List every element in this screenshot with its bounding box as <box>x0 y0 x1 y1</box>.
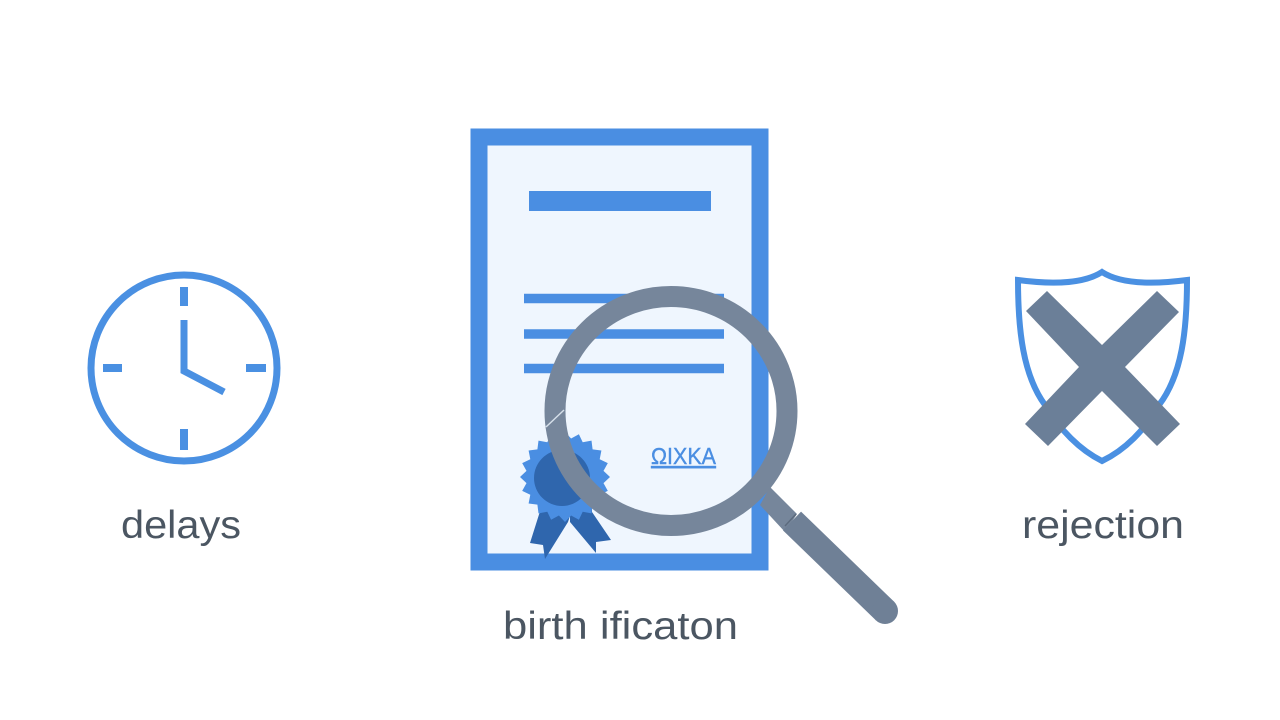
label: rejection: rejection <box>1022 504 1184 547</box>
certificate text lines <box>524 298 724 368</box>
certificate signature: ΩIXKA <box>651 443 717 469</box>
ribbon seal <box>520 432 611 559</box>
label: delays: delays <box>121 504 241 547</box>
icon: birth certificate document <box>479 137 760 562</box>
icon: shield with cross <box>1018 272 1187 461</box>
icon: magnifying glass <box>546 296 898 624</box>
label: birth ificaton: birth ificaton <box>503 605 738 648</box>
icon: clock <box>91 275 277 461</box>
certificate title bar <box>529 191 711 211</box>
